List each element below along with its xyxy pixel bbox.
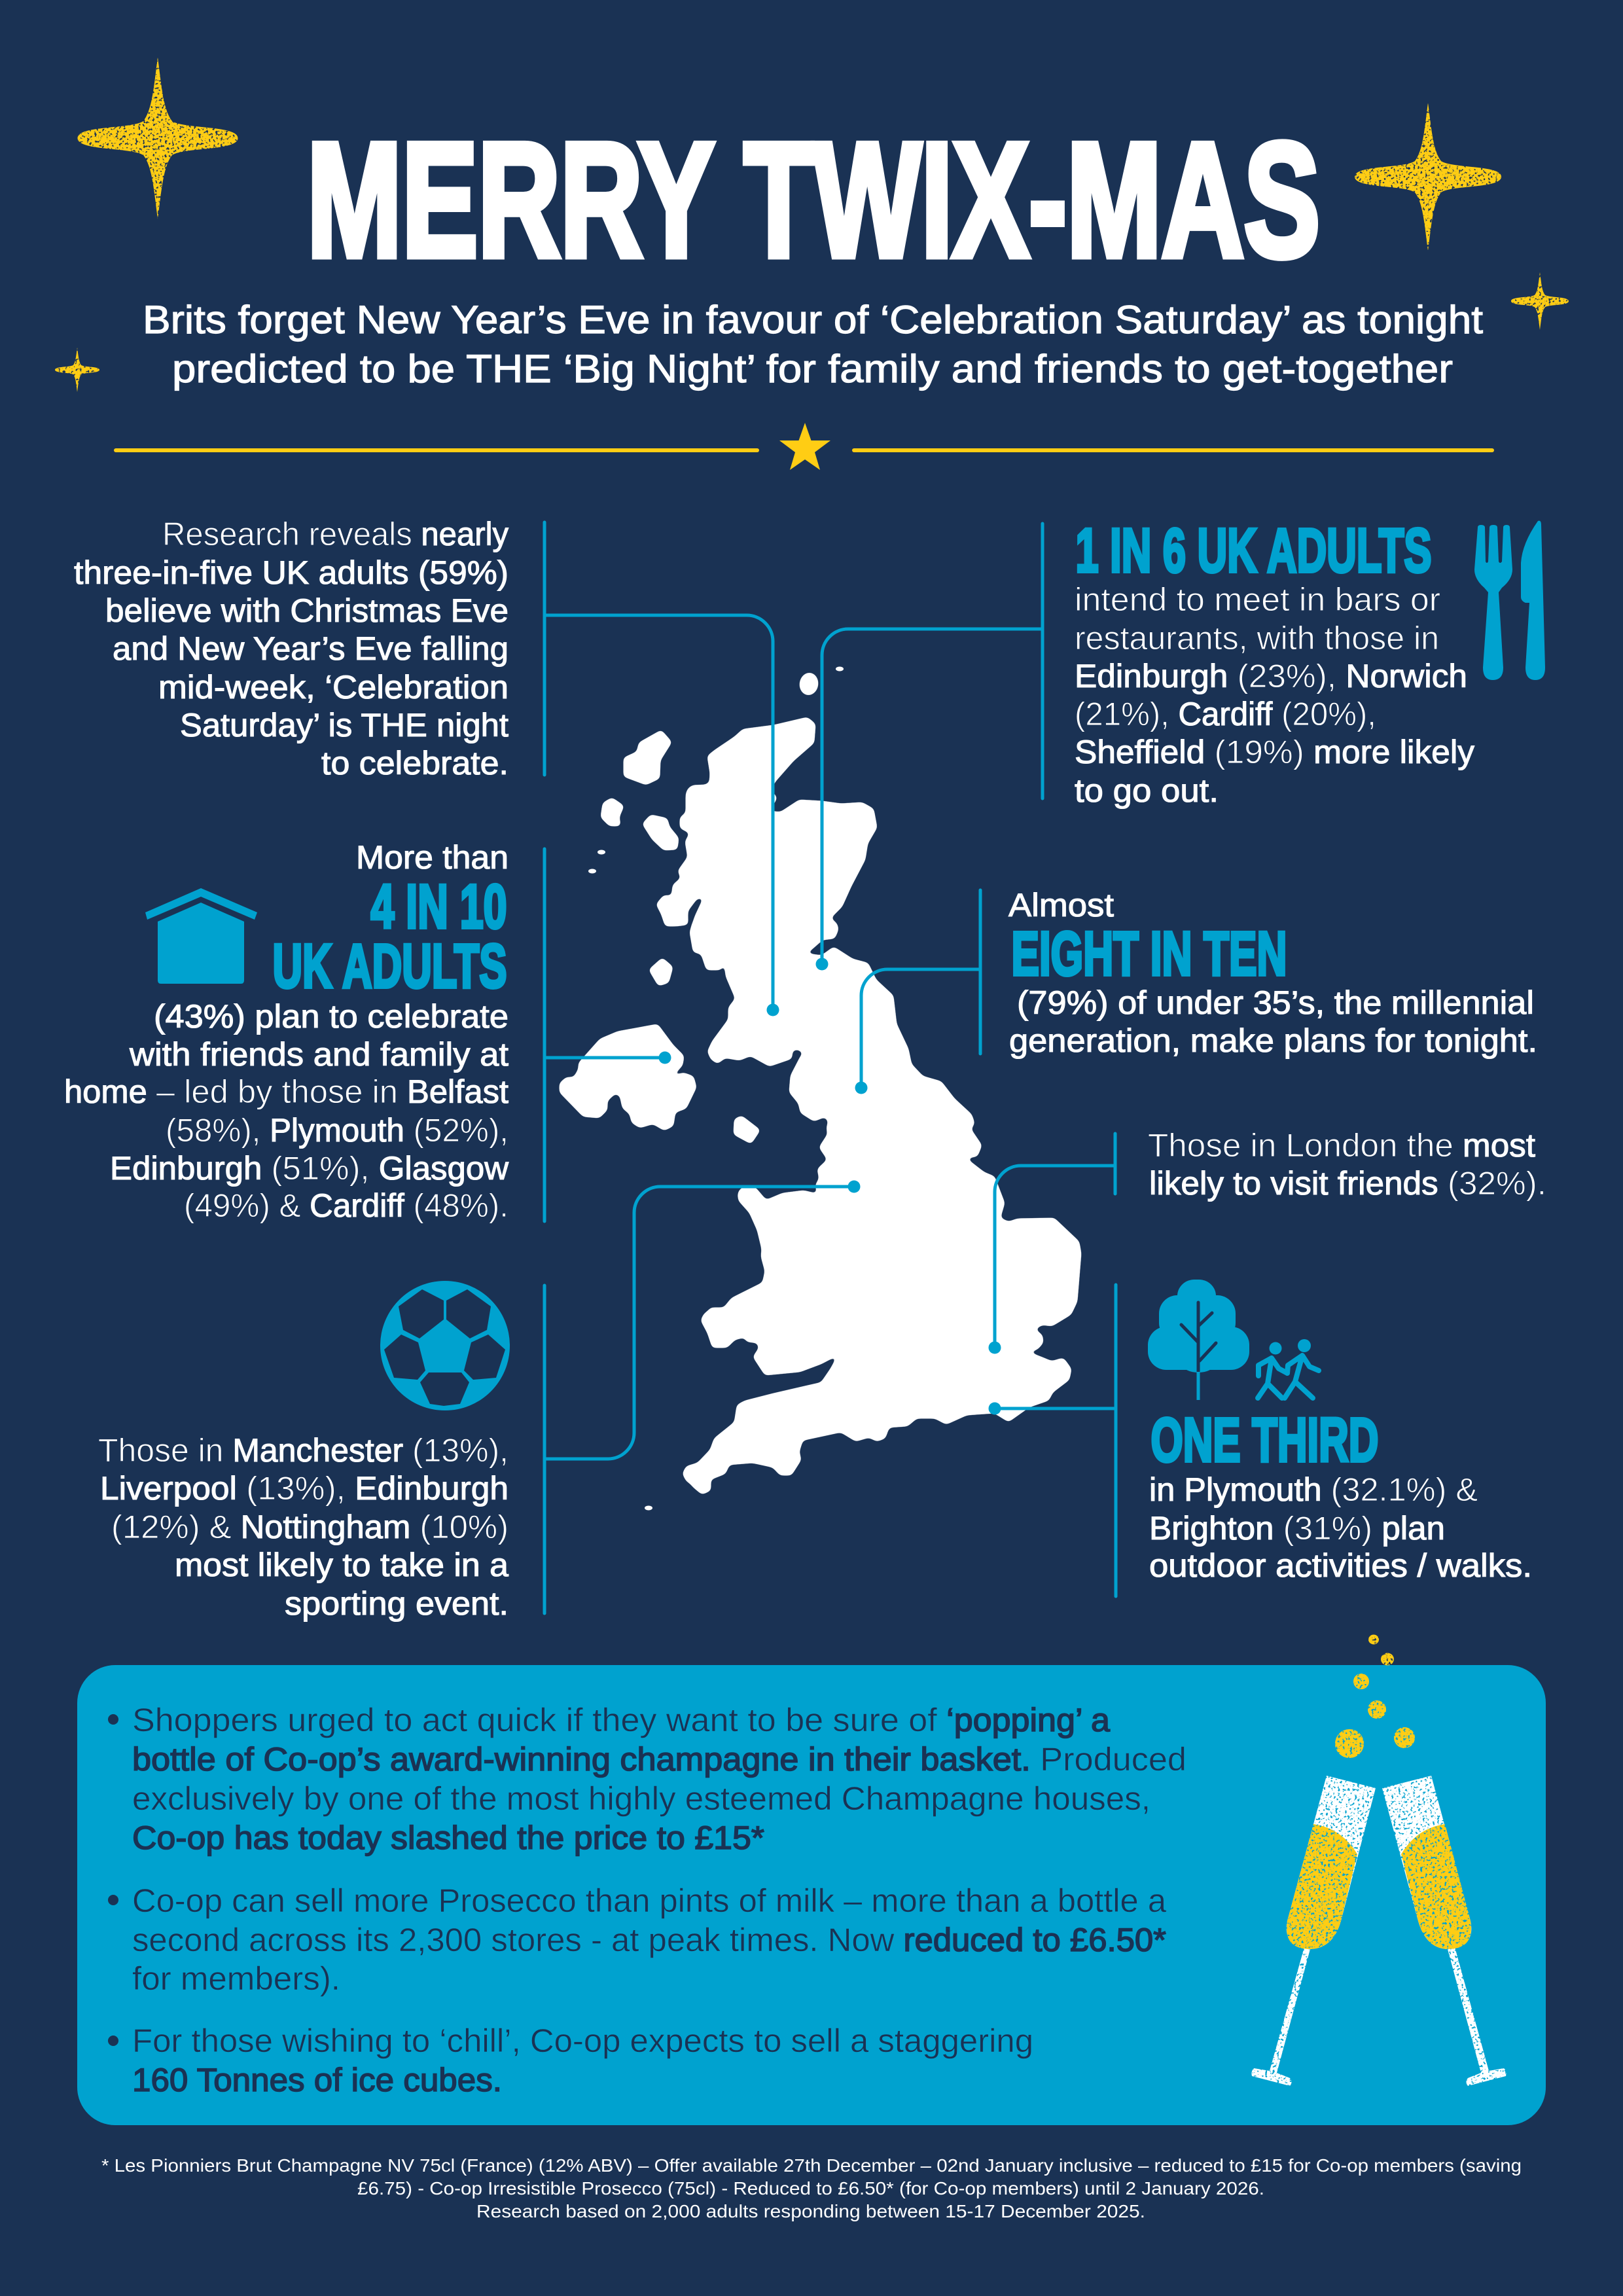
- heading: 1 in 6 UK adults: 1 IN 6 UK ADULTS: [1076, 516, 1432, 585]
- panel: 4 in 10 UK adults: [64, 839, 509, 1224]
- stat detail: Edinburgh (51%), Glasgow: [110, 1150, 509, 1187]
- text block: bars and restaurants: intend to meet in bars or: [1075, 581, 1440, 618]
- icon: football: [380, 1281, 510, 1410]
- bullet list: ice cubes: For those wishing to ‘chill’, Co-op expects to sell a staggering: [132, 2022, 1033, 2059]
- text block: London: likely to visit friends (32%).: [1149, 1165, 1546, 1202]
- bullet list: prosecco: for members).: [132, 1960, 340, 1997]
- text block: research reveals: Research reveals nearly: [162, 516, 508, 552]
- text block: sporting event: (12%) & Nottingham (10%): [111, 1509, 508, 1545]
- bullet list: prosecco: Co-op can sell more Prosecco than pints of milk – more than a bottle a: [132, 1882, 1166, 1919]
- text block: outdoor activities: [1149, 1471, 1532, 1584]
- stat detail: [64, 998, 509, 1224]
- icon: large sparkle top right: [1355, 103, 1501, 251]
- icon: small sparkle right: [1511, 272, 1569, 330]
- map: United Kingdom: [561, 666, 1080, 1511]
- stat intro: More than: [356, 839, 508, 876]
- text block: sporting event: most likely to take in a: [175, 1547, 508, 1583]
- bullet list: champagne: exclusively by one of the most highly esteemed Champagne houses,: [132, 1780, 1150, 1817]
- subtitle: Brits forget New Year’s Eve in favour of ‘Celebration Saturday’ as tonight: [143, 298, 1483, 342]
- stat intro: Almost: [1008, 887, 1114, 924]
- footnote: [101, 2155, 1522, 2221]
- bullet list: champagne: Shoppers urged to act quick if they want to be sure of ‘popping’ a: [132, 1702, 1110, 1738]
- panel: 1 in 6 UK adults: [1075, 516, 1545, 809]
- stat detail: home – led by those in Belfast: [64, 1073, 508, 1110]
- icon: large sparkle top left: [77, 58, 238, 219]
- stat detail: (43%) plan to celebrate: [154, 998, 508, 1035]
- panel: one third: [1148, 1280, 1532, 1584]
- text block: sporting event: Liverpool (13%), Edinburgh: [100, 1470, 508, 1507]
- bullet list: champagne: [108, 1702, 1186, 1856]
- stat detail: (79%) of under 35’s, the millennial: [1017, 984, 1534, 1021]
- text block: research reveals: believe with Christmas Eve: [105, 592, 508, 629]
- footnote: * Les Pionniers Brut Champagne NV 75cl (France) (12% ABV) – Offer available 27th December – 02nd January inclusive – reduced to £15 for Co-op members (saving: [101, 2155, 1522, 2176]
- text block: research reveals: to celebrate.: [321, 745, 508, 781]
- text block: bars and restaurants: [1075, 581, 1474, 809]
- stat detail: (49%) & Cardiff (48%).: [184, 1187, 508, 1224]
- stat detail: [1009, 984, 1537, 1059]
- icon: champagne bubbles: [1335, 1635, 1415, 1758]
- subtitle: [143, 298, 1483, 391]
- icon: tree: [1148, 1280, 1249, 1400]
- heading: UK adults: UK ADULTS: [272, 932, 507, 1001]
- icon: small sparkle left: [55, 348, 99, 392]
- text block: research reveals: mid-week, ‘Celebration: [158, 669, 508, 706]
- text block: research reveals: and New Year’s Eve falling: [113, 630, 508, 667]
- text block: sporting event: Those in Manchester (13%),: [98, 1432, 508, 1469]
- text block: London: Those in London the most: [1148, 1127, 1535, 1164]
- bullet list: ice cubes: [108, 2022, 1033, 2098]
- panel: Co-op offers: [77, 1665, 1546, 2125]
- icon: fork and knife: [1474, 521, 1545, 680]
- icon: right champagne flute: [1382, 1776, 1507, 2086]
- text block: bars and restaurants: (21%), Cardiff (20%),: [1075, 696, 1376, 732]
- stat detail: generation, make plans for tonight.: [1009, 1022, 1537, 1059]
- text block: research reveals: Saturday’ is THE night: [180, 707, 508, 744]
- icon: walkers: [1258, 1339, 1319, 1398]
- text block: research reveals: three-in-five UK adults (59%): [74, 554, 508, 591]
- bullet list: champagne: bottle of Co-op’s award-winning champagne in their basket. Produced: [132, 1741, 1186, 1778]
- connector lines and location markers: [544, 522, 1116, 1613]
- stat detail: (58%), Plymouth (52%),: [166, 1112, 508, 1149]
- footnote: £6.75) - Co-op Irresistible Prosecco (75cl) - Reduced to £6.50* (for Co-op members) until 2 January 2026.: [357, 2178, 1264, 2198]
- heading: one third: ONE THIRD: [1150, 1406, 1378, 1475]
- text block: sporting event: sporting event.: [285, 1585, 508, 1622]
- icon: house: [145, 888, 257, 984]
- icon: left champagne flute: [1251, 1776, 1376, 2086]
- text block: outdoor activities: in Plymouth (32.1%) &: [1149, 1471, 1478, 1508]
- text block: sporting event: [98, 1432, 508, 1622]
- divider with star: [116, 423, 1492, 470]
- panel: sporting event: [98, 1281, 510, 1622]
- footnote: Research based on 2,000 adults responding between 15-17 December 2025.: [476, 2201, 1145, 2221]
- panel: eight in ten: [1008, 887, 1537, 1059]
- stat detail: with friends and family at: [129, 1036, 508, 1073]
- bullet list: prosecco: second across its 2,300 stores - at peak times. Now reduced to £6.50*: [132, 1922, 1166, 1958]
- text block: research reveals: [74, 516, 508, 781]
- text block: outdoor activities: Brighton (31%) plan: [1149, 1510, 1445, 1547]
- text block: outdoor activities: outdoor activities / walks.: [1149, 1547, 1532, 1584]
- bullet list: ice cubes: 160 Tonnes of ice cubes.: [132, 2062, 502, 2098]
- heading: eight in ten: EIGHT IN TEN: [1012, 919, 1287, 988]
- bullet list: champagne: Co-op has today slashed the price to £15*: [132, 1820, 764, 1856]
- text block: bars and restaurants: to go out.: [1075, 772, 1219, 809]
- heading: 4 in 10: 4 IN 10: [370, 872, 507, 941]
- text block: London: [1148, 1127, 1546, 1202]
- subtitle: predicted to be THE ‘Big Night’ for family and friends to get-together: [172, 347, 1453, 391]
- bullet list: prosecco: [108, 1882, 1166, 1997]
- text block: bars and restaurants: Sheffield (19%) more likely: [1075, 734, 1474, 770]
- text block: bars and restaurants: restaurants, with those in: [1075, 620, 1439, 656]
- text block: bars and restaurants: Edinburgh (23%), Norwich: [1075, 658, 1467, 694]
